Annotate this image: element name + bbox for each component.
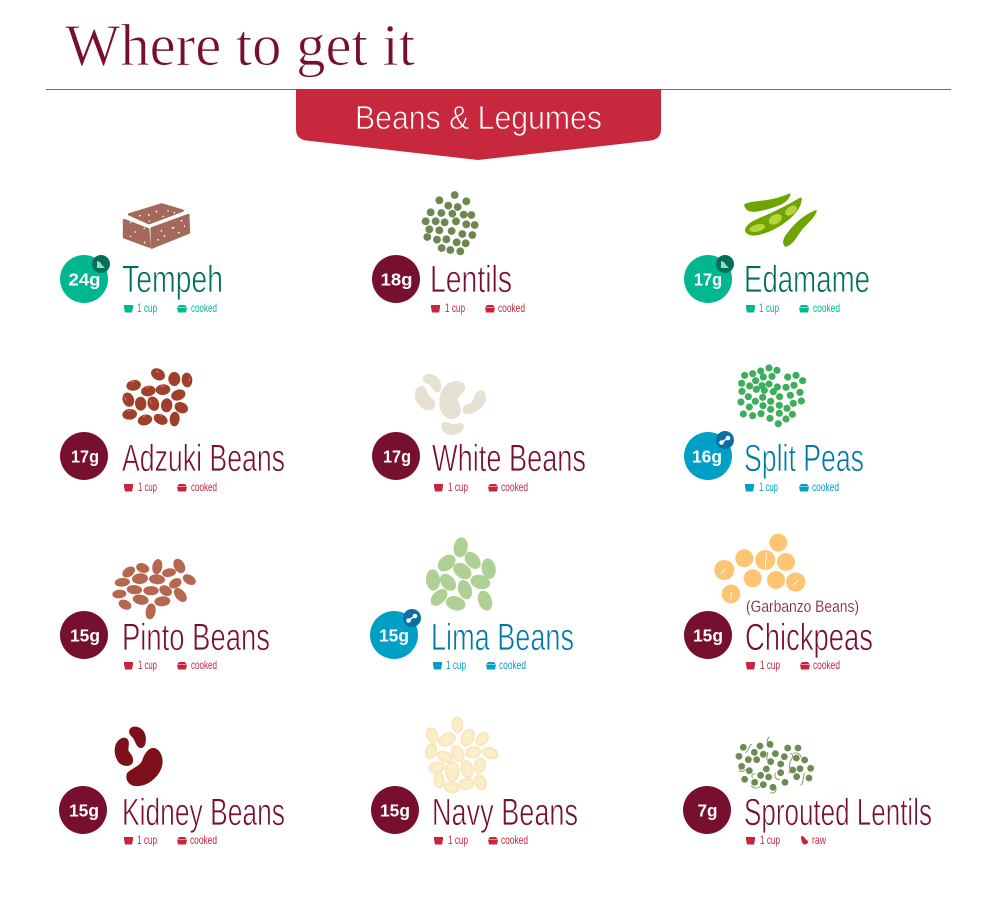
illustration: lentils xyxy=(422,191,478,255)
serving info: cooked xyxy=(813,658,840,672)
illustration: edamame pods xyxy=(745,195,816,246)
serving info: 1 cup xyxy=(760,658,780,672)
name: Pinto Beans xyxy=(122,617,270,659)
serving info: 1 cup xyxy=(138,480,157,494)
item: Kidney Beans: 15g xyxy=(69,800,99,820)
badge: soy xyxy=(716,255,734,273)
serving info: 1 cup xyxy=(445,301,465,315)
serving info xyxy=(434,480,528,494)
serving info xyxy=(124,301,217,315)
item: Lentils: 18g xyxy=(380,270,412,290)
serving info xyxy=(124,658,217,672)
serving info xyxy=(124,480,217,494)
banner: Beans & Legumes: Beans & Legumes xyxy=(355,99,602,136)
protein circle xyxy=(684,255,732,303)
illustration: tempeh block xyxy=(124,204,189,248)
protein circle xyxy=(60,611,108,659)
protein circle xyxy=(59,786,107,834)
serving info: cooked xyxy=(499,658,526,672)
illustration: sprouted lentils xyxy=(736,737,814,793)
item: Kidney Beans xyxy=(59,727,285,847)
illustration: white beans xyxy=(416,375,485,434)
badge: legume xyxy=(716,431,734,449)
name: Split Peas xyxy=(744,438,864,480)
item: Edamame: 17g xyxy=(694,270,722,290)
serving info: cooked xyxy=(501,833,528,847)
protein circle xyxy=(684,611,732,659)
serving info: cooked xyxy=(812,480,839,494)
protein circle xyxy=(371,786,419,834)
serving info: cooked xyxy=(498,301,525,315)
item: Tempeh xyxy=(60,204,223,315)
illustration: lima beans xyxy=(426,537,496,611)
item: Adzuki Beans xyxy=(60,367,285,494)
illustration: chickpeas xyxy=(714,534,805,603)
item: White Beans xyxy=(372,375,586,494)
name: Lentils xyxy=(430,259,512,301)
item: Adzuki Beans: 17g xyxy=(71,446,99,466)
item: Sprouted Lentils: 7g xyxy=(698,800,718,820)
alternate name: (Garbanzo Beans) xyxy=(746,597,859,616)
name: Lima Beans xyxy=(431,617,574,659)
name: Edamame xyxy=(744,259,870,301)
serving info: cooked xyxy=(501,480,528,494)
serving info xyxy=(746,301,840,315)
badge: legume xyxy=(403,609,421,627)
name: Tempeh xyxy=(122,259,223,301)
illustration: navy beans xyxy=(424,717,499,794)
serving info: 1 cup xyxy=(448,480,468,494)
serving info: 1 cup xyxy=(137,301,157,315)
illustration: kidney beans xyxy=(115,727,162,786)
serving info: cooked xyxy=(813,301,840,315)
banner: Beans & Legumes xyxy=(296,89,661,160)
item: Lima Beans xyxy=(370,537,574,672)
serving info: raw xyxy=(812,833,826,847)
serving info: 1 cup xyxy=(448,833,468,847)
item: Split Peas: 16g xyxy=(692,446,722,466)
serving info xyxy=(745,480,839,494)
item: Navy Beans: 15g xyxy=(380,800,410,820)
serving info: 1 cup xyxy=(759,301,779,315)
serving info xyxy=(434,833,528,847)
item: Chickpeas xyxy=(684,534,873,672)
illustration: pinto beans xyxy=(113,558,197,619)
serving info: 1 cup xyxy=(138,658,157,672)
serving info: cooked xyxy=(191,658,217,672)
serving info: 1 cup xyxy=(137,833,157,847)
item: Navy Beans xyxy=(371,717,578,847)
protein circle xyxy=(60,255,108,303)
protein circle xyxy=(684,432,732,480)
protein circle xyxy=(60,432,108,480)
name: Kidney Beans xyxy=(122,792,285,834)
protein circle xyxy=(683,786,731,834)
protein circle xyxy=(370,611,418,659)
item: Edamame xyxy=(684,195,870,315)
serving info xyxy=(746,658,840,672)
protein circle xyxy=(372,255,420,303)
illustration: adzuki beans xyxy=(121,367,192,426)
item: Lentils xyxy=(372,191,525,315)
serving info: 1 cup xyxy=(760,833,780,847)
name: Navy Beans xyxy=(432,792,578,834)
protein circle xyxy=(372,432,420,480)
serving info: cooked xyxy=(190,833,217,847)
item: Sprouted Lentils xyxy=(683,737,932,847)
serving info: 1 cup xyxy=(446,658,466,672)
serving info: cooked xyxy=(191,480,217,494)
item: Pinto Beans: 15g xyxy=(70,626,100,646)
badge: soy xyxy=(92,255,110,273)
name: Adzuki Beans xyxy=(122,438,285,480)
item: Chickpeas: 15g xyxy=(693,626,723,646)
title: Where to get it xyxy=(65,12,416,78)
item: Pinto Beans xyxy=(60,558,270,672)
name: White Beans xyxy=(432,438,586,480)
serving info: 1 cup xyxy=(759,480,778,494)
item: Tempeh: 24g xyxy=(68,270,100,290)
serving info xyxy=(433,658,526,672)
item: White Beans: 17g xyxy=(383,446,411,466)
serving info: cooked xyxy=(191,301,217,315)
serving info xyxy=(124,833,217,847)
serving info xyxy=(746,833,826,847)
serving info xyxy=(431,301,525,315)
item: Lima Beans: 15g xyxy=(379,626,409,646)
illustration: split peas xyxy=(738,365,806,427)
name: Chickpeas xyxy=(745,617,873,659)
item: Split Peas xyxy=(684,365,864,494)
